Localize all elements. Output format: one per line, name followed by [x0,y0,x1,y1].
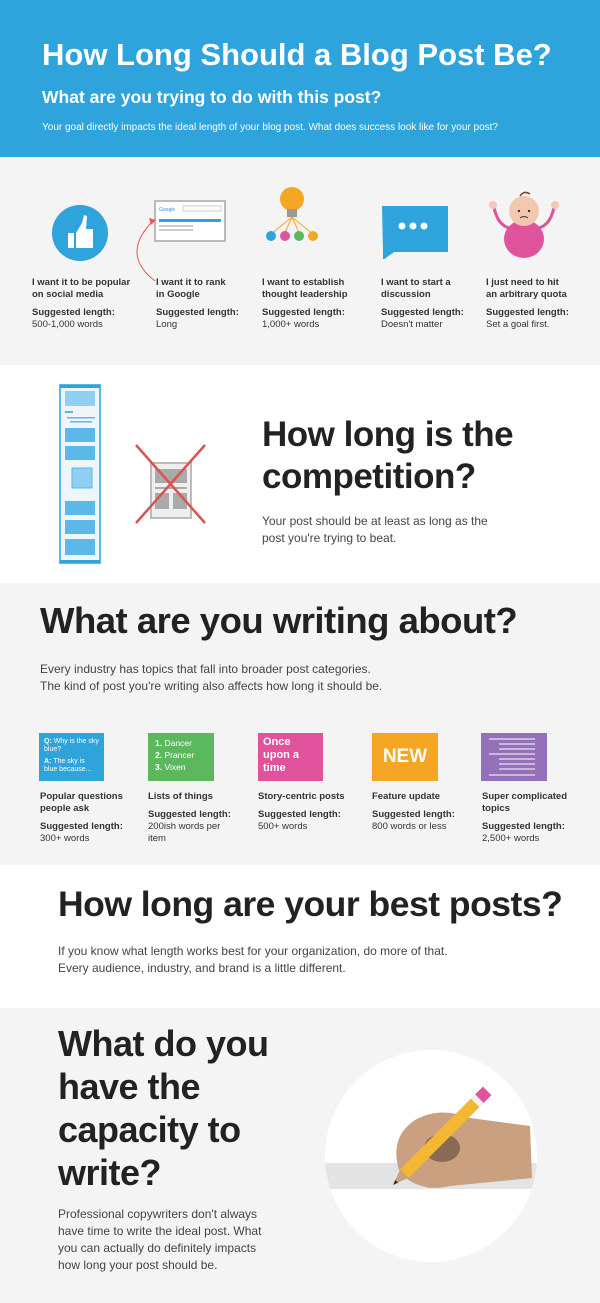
illustration: long vs short post [59,384,206,564]
heading: competition [262,415,513,496]
icon: lightbulb [266,187,318,241]
heading: capacity: have the [58,1066,200,1107]
caption: feature [372,791,455,832]
caption: feature: 800 words or less [372,821,446,832]
caption: feature: Feature update [372,791,440,802]
text: competition: Your post should be at least as long as the [262,514,488,528]
intro text: Your goal directly impacts the ideal length of your blog post. What does success look like for your post? [42,122,498,133]
caption: story: Story-centric posts [258,791,345,802]
caption: questions: Popular questions [40,791,123,802]
caption: questions: Suggested length: [40,821,123,832]
caption: feature: Suggested length: [372,809,455,820]
caption: complicated: topics [482,803,510,814]
caption: discussion [381,277,464,330]
caption: leadership: I want to establish [262,277,344,288]
caption: quota: I just need to hit [486,277,559,288]
caption: quota [486,277,569,330]
icon: story card: upon a [263,749,299,761]
icon: story card: time [263,762,286,774]
heading: competition: competition? [262,457,476,496]
caption: quota: Suggested length: [486,307,569,318]
caption: google [156,277,239,330]
caption: lists: item [148,833,166,844]
caption: social: Suggested length: [32,307,115,318]
header section [0,0,600,157]
caption: discussion: I want to start a [381,277,451,288]
icon: new card: NEW [383,746,427,767]
caption: leadership: Suggested length: [262,307,345,318]
caption: google: I want it to rank [156,277,226,288]
caption: discussion: Doesn't matter [381,319,442,330]
panel: competition [0,365,600,583]
text: topics [40,662,382,693]
text: competition [262,514,488,545]
text: capacity: have time to write the ideal post. What [58,1224,261,1238]
caption: leadership: thought leadership [262,289,348,300]
icon: thumbs up [52,205,108,261]
panel: capacity [0,1008,600,1303]
text: topics: Every industry has topics that fall into broader post categories. [40,662,371,676]
icon: list card [148,733,214,781]
caption: lists: Suggested length: [148,809,231,820]
caption: google: in Google [156,289,200,300]
caption: questions: 300+ words [40,833,89,844]
icon: Q&A card: A: The sky is blue because... [44,758,91,773]
caption: google: Suggested length: [156,307,239,318]
caption: discussion: Suggested length: [381,307,464,318]
panel: goals [0,157,600,365]
icon: frustrated person [489,192,559,258]
caption: social: on social media [32,289,103,300]
icon: Q&A card: Q: Why is the sky blue? [44,738,99,753]
icon: Q&A card [39,733,104,781]
heading: best posts: How long are your best posts? [58,884,562,924]
title: How Long Should a Blog Post Be? [42,37,552,72]
text: capacity: how long your post should be. [58,1258,217,1272]
icon: new card [372,733,438,781]
caption: social: I want it to be popular [32,277,130,288]
caption: discussion: discussion [381,289,431,300]
caption: lists [148,791,231,844]
icon: list card: 2. Prancer [155,750,194,760]
caption: quota: Set a goal first. [486,319,549,330]
illustration: hand writing [325,1050,537,1262]
caption: leadership: 1,000+ words [262,319,319,330]
text: topics: The kind of post you're writing also affects how long it should be. [40,679,382,693]
heading: competition: How long is the [262,415,513,454]
subtitle: What are you trying to do with this post? [42,87,381,107]
heading: topics: What are you writing about? [40,600,517,641]
caption: lists: 200ish words per [148,821,220,832]
caption: lists: Lists of things [148,791,213,802]
text: competition: post you're trying to beat. [262,531,396,545]
caption: complicated: 2,500+ words [482,833,539,844]
caption: leadership [262,277,348,330]
heading: capacity: write? [58,1152,161,1193]
text: best posts: If you know what length works best for your organization, do more of that. [58,944,448,958]
text: capacity: Professional copywriters don't always [58,1207,257,1221]
panel: best posts [0,865,600,1008]
icon: story card: Once [263,736,291,748]
heading: capacity: What do you [58,1023,268,1064]
icon: speech bubble [382,206,448,259]
caption: story: 500+ words [258,821,307,832]
text: capacity [58,1207,262,1272]
icon: list card: 3. Vixen [155,762,186,772]
caption: google: Long [156,319,177,330]
caption: complicated [482,791,567,844]
text: capacity: you can actually do definitely impacts [58,1241,256,1255]
caption: questions [40,791,123,844]
caption: questions: people ask [40,803,89,814]
caption: story [258,791,345,832]
caption: story: Suggested length: [258,809,341,820]
caption: social [32,277,130,330]
icon: story card [258,733,323,781]
icon: outline card [481,733,547,781]
icon: list card: 1. Dancer [155,738,192,748]
panel: topics [0,583,600,865]
caption: complicated: Suggested length: [482,821,565,832]
caption: complicated: Super complicated [482,791,567,802]
icon: google page: Google [159,207,175,213]
heading: capacity [58,1023,268,1193]
text: best posts: Every audience, industry, and brand is a little different. [58,961,346,975]
text: best posts [58,944,448,975]
caption: social: 500-1,000 words [32,319,103,330]
icon: google page [136,200,226,281]
heading: capacity: capacity to [58,1109,241,1150]
caption: quota: an arbitrary quota [486,289,567,300]
